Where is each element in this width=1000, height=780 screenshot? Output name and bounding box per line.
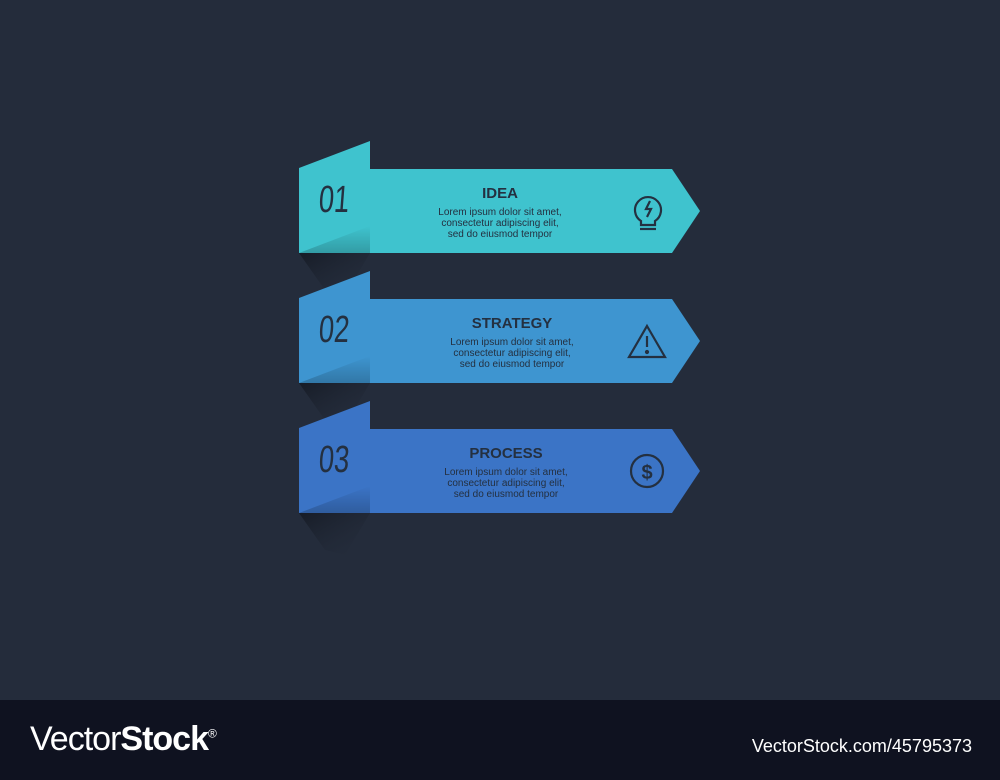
- step 3: process: Lorem ipsum dolor sit amet,: [444, 467, 568, 478]
- image id: VectorStock.com/45795373: [752, 736, 972, 756]
- step 1: idea: 01: [317, 179, 351, 221]
- step 2: strategy: sed do eiusmod tempor: [460, 359, 565, 370]
- step 1: idea: consectetur adipiscing elit,: [441, 218, 559, 229]
- step 1: idea: [299, 141, 700, 295]
- icon: dollar coin: $: [641, 462, 653, 484]
- step 1: idea: sed do eiusmod tempor: [448, 229, 553, 240]
- step 3: process: sed do eiusmod tempor: [454, 489, 559, 500]
- step 1: idea: Lorem ipsum dolor sit amet,: [438, 207, 562, 218]
- logo: VectorStock®: [30, 720, 216, 758]
- icon: light bulb: [635, 197, 661, 229]
- step 2: strategy: [299, 271, 700, 425]
- step 3: process: PROCESS: [469, 445, 543, 462]
- step 2: strategy: consectetur adipiscing elit,: [453, 348, 571, 359]
- step 3: process: consectetur adipiscing elit,: [447, 478, 565, 489]
- step 2: strategy: 02: [317, 309, 351, 351]
- step 1: idea: IDEA: [482, 185, 518, 202]
- step 3: process: [299, 401, 700, 555]
- step 2: strategy: STRATEGY: [472, 315, 552, 332]
- step 3: process: 03: [317, 439, 351, 481]
- icon: dollar coin: [631, 455, 663, 487]
- step 2: strategy: Lorem ipsum dolor sit amet,: [450, 337, 574, 348]
- icon: warning: [629, 326, 665, 357]
- footer bar: [0, 700, 1000, 780]
